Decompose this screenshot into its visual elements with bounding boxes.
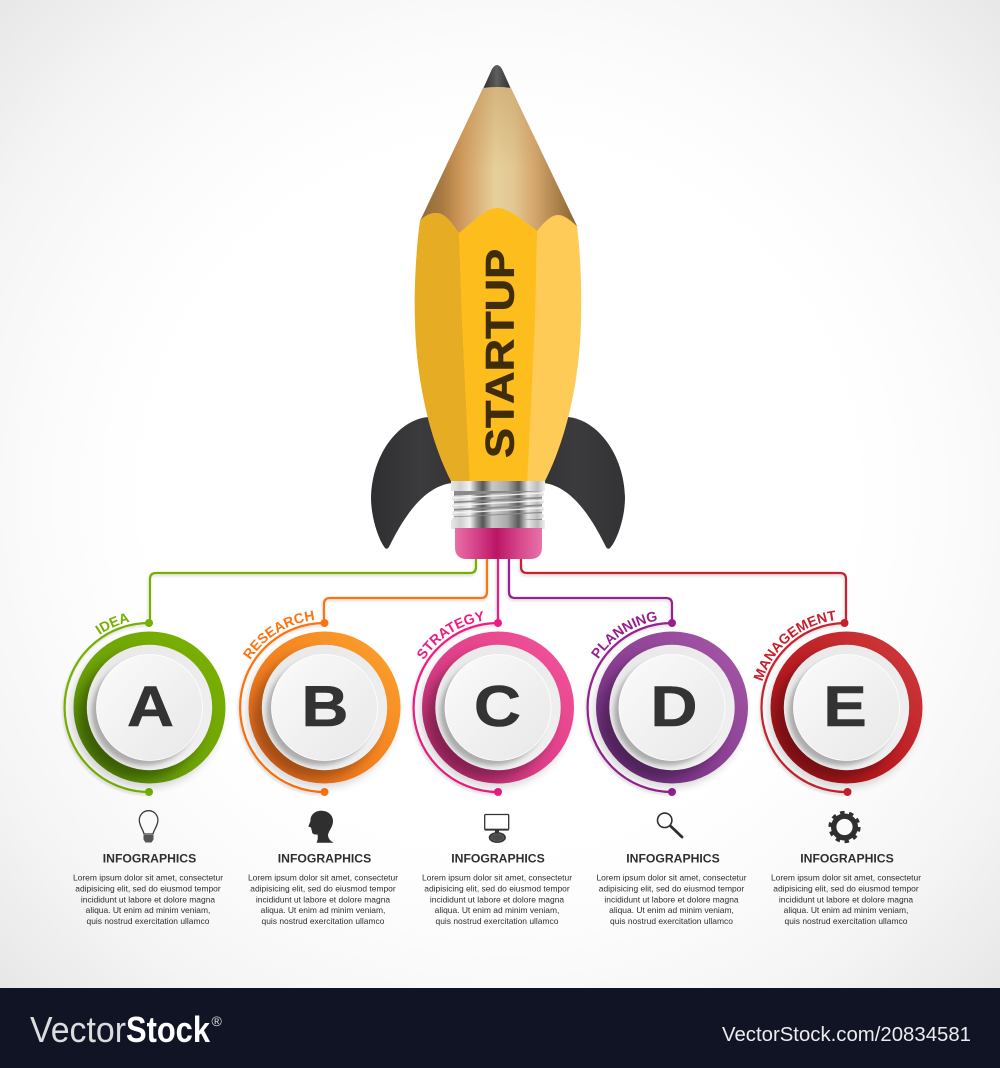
disc E xyxy=(768,632,922,788)
heading B: INFOGRAPHICS xyxy=(278,852,371,866)
right facet xyxy=(414,208,582,481)
node A: idea xyxy=(62,613,226,796)
body E: adipisicing elit, sed do eiusmod tempor xyxy=(773,884,919,894)
connector: management xyxy=(521,556,846,623)
pencil lead tip xyxy=(483,65,511,89)
body B: Lorem ipsum dolor sit amet, consectetur xyxy=(248,873,398,883)
body A: adipisicing elit, sed do eiusmod tempor xyxy=(75,884,221,894)
centre facet xyxy=(459,200,537,485)
connector: research xyxy=(324,556,487,623)
node D: planning xyxy=(584,612,748,796)
body E: incididunt ut labore et dolore magna xyxy=(779,894,913,904)
text block C xyxy=(422,852,572,926)
text block D xyxy=(596,852,747,926)
disc C xyxy=(419,632,574,788)
body D: adipisicing elit, sed do eiusmod tempor xyxy=(599,884,744,894)
icon: light bulb xyxy=(139,811,158,842)
disc B xyxy=(246,632,400,788)
curved label: idea: IDEA xyxy=(95,613,130,634)
arc line D xyxy=(588,623,672,792)
letter B: B xyxy=(302,675,348,738)
dot top D xyxy=(668,619,676,627)
dot bottom B xyxy=(320,788,328,796)
node B: research xyxy=(237,610,400,796)
heading D: INFOGRAPHICS xyxy=(626,852,720,866)
body B xyxy=(248,873,398,926)
thread ridges xyxy=(455,494,541,520)
arc line A xyxy=(65,623,149,792)
dot top A xyxy=(145,619,153,627)
arc line E xyxy=(761,623,847,792)
body B: aliqua. Ut enim ad minim veniam, xyxy=(261,905,385,915)
body C: incididunt ut labore et dolore magna xyxy=(430,894,564,904)
dot bottom A xyxy=(145,788,153,796)
dot bottom C xyxy=(494,788,502,796)
connector lines xyxy=(150,556,846,623)
body E: Lorem ipsum dolor sit amet, consectetur xyxy=(771,873,921,883)
body D: aliqua. Ut enim ad minim veniam, xyxy=(609,905,734,915)
connector: strategy xyxy=(497,556,499,623)
heading E: INFOGRAPHICS xyxy=(800,852,894,866)
arc line C xyxy=(414,623,498,792)
left fin xyxy=(371,417,470,549)
left facet xyxy=(414,213,470,481)
body A: incididunt ut labore et dolore magna xyxy=(81,894,215,904)
body D: Lorem ipsum dolor sit amet, consectetur xyxy=(596,873,747,883)
dot bottom E xyxy=(844,788,852,796)
body B: adipisicing elit, sed do eiusmod tempor xyxy=(250,884,396,894)
sharpened wood cone xyxy=(420,87,577,240)
body C: adipisicing elit, sed do eiusmod tempor xyxy=(424,884,570,894)
dot top E xyxy=(840,619,848,627)
heading A: INFOGRAPHICS xyxy=(103,852,196,866)
letter A: A xyxy=(127,675,174,738)
body C xyxy=(422,873,572,926)
body A xyxy=(73,873,223,926)
connector: idea xyxy=(150,556,476,623)
letter D: D xyxy=(651,675,697,738)
body A: quis nostrud exercitation ullamco xyxy=(87,916,210,926)
icon: gear xyxy=(830,813,858,841)
body E: quis nostrud exercitation ullamco xyxy=(785,916,908,926)
curved label: research: RESEARCH xyxy=(242,610,314,660)
footer bar xyxy=(0,988,1000,1068)
pencil body xyxy=(414,208,582,481)
body C: Lorem ipsum dolor sit amet, consectetur xyxy=(422,873,572,883)
metal ferrule xyxy=(451,481,545,529)
right fin xyxy=(526,417,625,549)
node C: strategy xyxy=(410,611,574,796)
footer image id: VectorStock.com/20834581 xyxy=(722,1023,971,1046)
dot top B xyxy=(320,619,328,627)
disc A xyxy=(70,632,226,788)
body C: quis nostrud exercitation ullamco xyxy=(436,916,559,926)
heading C: INFOGRAPHICS xyxy=(451,852,545,866)
body D: quis nostrud exercitation ullamco xyxy=(610,916,733,926)
body C: aliqua. Ut enim ad minim veniam, xyxy=(435,905,559,915)
text block E xyxy=(771,852,921,926)
letter C: C xyxy=(474,675,521,738)
icon: monitor xyxy=(485,814,509,843)
footer logo: Stock xyxy=(126,1009,211,1050)
arc line B xyxy=(240,623,324,792)
thread base xyxy=(454,489,542,521)
dot bottom D xyxy=(668,788,676,796)
text block B xyxy=(248,852,398,926)
text block A xyxy=(73,852,223,926)
startup label: STARTUP xyxy=(478,249,522,458)
body B: incididunt ut labore et dolore magna xyxy=(256,894,390,904)
node E: management xyxy=(754,610,922,796)
body E xyxy=(771,873,921,926)
top band xyxy=(451,481,545,491)
body D xyxy=(596,873,747,926)
footer logo: Vector xyxy=(30,1009,126,1050)
body A: Lorem ipsum dolor sit amet, consectetur xyxy=(73,873,223,883)
body B: quis nostrud exercitation ullamco xyxy=(262,916,385,926)
letter E: E xyxy=(823,675,867,738)
body A: aliqua. Ut enim ad minim veniam, xyxy=(86,905,210,915)
bottom band xyxy=(451,520,545,529)
body D: incididunt ut labore et dolore magna xyxy=(604,894,739,904)
curved label: strategy: STRATEGY xyxy=(417,611,483,659)
body E: aliqua. Ut enim ad minim veniam, xyxy=(784,905,908,915)
curved label: planning: PLANNING xyxy=(591,612,657,659)
eraser xyxy=(455,528,542,559)
rocket pencil xyxy=(371,65,625,559)
connector: planning xyxy=(509,556,672,623)
icon: magnifying glass xyxy=(658,813,682,837)
icon: human head xyxy=(308,811,334,843)
disc D xyxy=(593,632,748,788)
curved label: management: MANAGEMENT xyxy=(754,610,836,681)
footer logo: ® xyxy=(212,1013,222,1029)
thread highlights xyxy=(453,493,543,513)
dot top C xyxy=(494,619,502,627)
footer logo xyxy=(30,1009,222,1050)
